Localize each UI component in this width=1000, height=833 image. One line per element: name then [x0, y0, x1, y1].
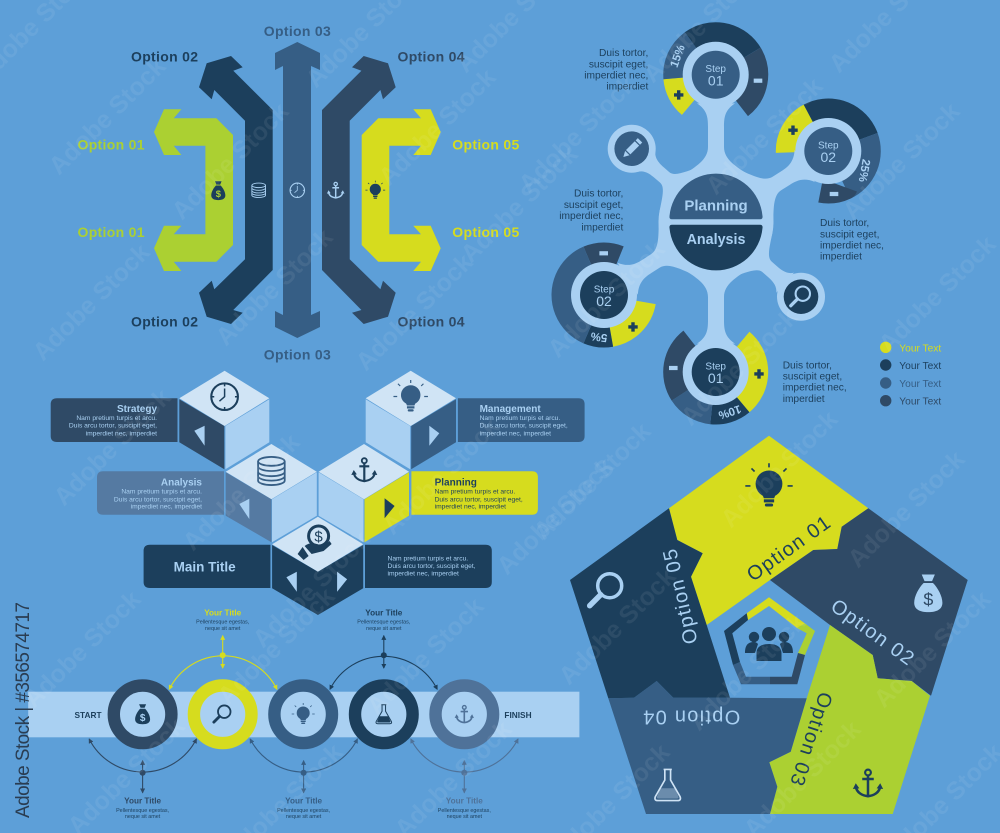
node: bottom step 01: Step — [705, 362, 726, 372]
arrow: option 02 — [199, 56, 273, 324]
callout: mid bottom: neque sit amet — [286, 814, 322, 820]
callout: navy top: neque sit amet — [366, 626, 402, 632]
donut: right step 02 — [774, 97, 882, 205]
box: management: Management — [480, 404, 541, 415]
arrow: option 05 — [362, 109, 441, 271]
box: analysis: Nam pretium turpis et arcu. — [121, 489, 202, 496]
icon: money bag: $ — [216, 188, 222, 199]
callout: muted bottom: Your Title — [446, 796, 483, 805]
box: analysis: imperdiet nec, imperdiet — [131, 504, 202, 511]
callout: navy top: Pellentesque egestas, — [357, 620, 411, 626]
legend: Your Text — [899, 379, 941, 390]
label: option 03 top: Option 03 — [264, 23, 331, 39]
watermark: Adobe Stock — [513, 70, 641, 198]
box: planning: imperdiet nec, imperdiet — [435, 504, 506, 511]
label: option 03: Option 03 — [785, 689, 836, 788]
inner pentagon ring — [724, 597, 815, 684]
callout: muted bottom — [411, 739, 518, 820]
note: right: suscipit eget, — [820, 229, 879, 240]
label: option 02 bottom: Option 02 — [131, 314, 198, 330]
ring: money bag — [114, 686, 171, 743]
label: option 02 top: Option 02 — [131, 49, 198, 65]
icon: anchor — [327, 182, 345, 198]
icon: people — [745, 627, 793, 661]
box: strategy: Strategy — [117, 404, 157, 415]
analysis half disc: Analysis — [687, 232, 745, 248]
callout: yellow top: neque sit amet — [205, 626, 241, 632]
percent: 25%: 25% — [856, 158, 872, 183]
box: main title — [144, 545, 270, 588]
watermark: Adobe Stock — [491, 452, 619, 580]
ring: flask — [355, 686, 413, 743]
watermark: Adobe Stock — [18, 585, 146, 713]
callout: navy top — [330, 608, 437, 689]
arrow: option 03 — [275, 42, 320, 338]
panel: planning and analysis hub — [552, 18, 941, 428]
node: right step 02: 02 — [821, 149, 836, 165]
legend: Your Text — [899, 361, 941, 372]
analysis half disc — [669, 225, 763, 270]
node: left step 02: Step — [594, 284, 615, 296]
watermark: Adobe Stock — [683, 608, 811, 736]
callout: muted bottom: Pellentesque egestas, — [438, 808, 491, 814]
segment: option 03 — [769, 625, 930, 814]
box: strategy: imperdiet nec, imperdiet — [86, 430, 157, 437]
node: bottom step 01 — [692, 348, 740, 396]
icon: money bag — [211, 181, 225, 200]
cube: planning — [319, 444, 409, 542]
note: top left: imperdiet nec, — [584, 70, 648, 81]
box: planning: Duis arcu tortor, suscipit eget, — [435, 496, 523, 503]
icon: bulb — [365, 181, 385, 199]
icon: database — [252, 183, 266, 198]
planning half disc: Planning — [684, 198, 748, 215]
watermark: Adobe Stock — [868, 585, 996, 713]
label: option 04 bottom: Option 04 — [398, 314, 465, 330]
icon: money bag — [914, 574, 942, 612]
node: top step 01: Step — [705, 64, 726, 75]
segment: option 04 — [608, 681, 807, 814]
node: right step 02 — [804, 127, 852, 175]
finish label: FINISH — [504, 710, 532, 720]
planning half disc — [669, 174, 763, 219]
connector body — [571, 42, 861, 405]
box: main description: Nam pretium turpis et arcu. — [388, 555, 468, 562]
node: search icon — [784, 279, 818, 314]
box: analysis — [97, 471, 224, 515]
icon: magnifier — [590, 574, 622, 606]
note: right: imperdiet — [820, 252, 862, 263]
label: option 01: Option 01 — [743, 512, 835, 586]
callout: mid bottom: Your Title — [285, 796, 323, 805]
percent: 15%: 15% — [669, 43, 688, 69]
watermark: Adobe Stock — [700, 72, 828, 200]
label: option 02: Option 02 — [826, 595, 918, 670]
note: bottom: imperdiet — [783, 394, 825, 405]
note: right: Duis tortor, — [820, 218, 869, 229]
watermark: Adobe Stock — [553, 562, 681, 690]
label: option 04 top: Option 04 — [398, 49, 465, 65]
legend: Your Text — [899, 397, 941, 408]
node: pencil icon — [614, 131, 649, 166]
start label: START — [74, 710, 102, 720]
callout: slate bottom — [89, 739, 196, 820]
node: top step 01: 01 — [708, 72, 724, 88]
icon: flask — [655, 769, 680, 801]
icon: money bag: $ — [923, 590, 933, 610]
box: management: Nam pretium turpis et arcu. — [480, 415, 560, 422]
watermark: Adobe Stock — [873, 230, 1000, 358]
callout: slate bottom: Your Title — [124, 796, 162, 805]
watermark: Adobe Stock — [455, 140, 583, 268]
note: left: imperdiet — [581, 222, 623, 233]
callout: yellow top: Your Title — [204, 608, 242, 618]
segment: option 05 — [570, 508, 730, 698]
ring: anchor — [436, 686, 493, 743]
callout: slate bottom: Pellentesque egestas, — [116, 808, 170, 814]
box: strategy: Nam pretium turpis et arcu. — [76, 415, 157, 422]
icon: clock — [290, 183, 304, 198]
callout: slate bottom: neque sit amet — [125, 814, 161, 820]
note: bottom: suscipit eget, — [783, 372, 842, 383]
arrow: option 01 — [154, 109, 233, 271]
label: option 04: Option 04 — [643, 706, 740, 728]
watermark: Adobe Stock — [27, 238, 155, 366]
watermark: Adobe Stock — [715, 405, 843, 533]
donut: left step 02 — [552, 243, 656, 347]
cube: analysis — [226, 444, 317, 542]
percent: 5%: 5% — [590, 329, 608, 343]
watermark: Adobe Stock — [350, 248, 478, 376]
callout: yellow top: Pellentesque egestas, — [196, 620, 250, 626]
callout: mid bottom: Pellentesque egestas, — [277, 808, 331, 814]
label: option 03 bottom: Option 03 — [264, 346, 331, 362]
watermark: Adobe Stock — [542, 235, 670, 363]
icon: anchor — [853, 770, 883, 796]
segment: option 02 — [770, 508, 968, 696]
box: main description: Duis arcu tortor, suscipit eget, — [388, 563, 476, 570]
label: option 01 top: Option 01 — [78, 136, 145, 152]
watermark: Adobe Stock — [377, 412, 505, 540]
node: left step 02 — [580, 271, 628, 319]
box: strategy: Duis arcu tortor, suscipit eget, — [69, 423, 157, 430]
panel: start to finish timeline — [28, 608, 579, 820]
box: management: imperdiet nec, imperdiet — [480, 430, 551, 437]
note: left: suscipit eget, — [564, 200, 623, 211]
callout: navy top: Your Title — [365, 608, 403, 618]
watermark: Adobe Stock — [842, 445, 970, 573]
cube: management — [366, 371, 456, 469]
watermark: Adobe Stock — [247, 525, 375, 653]
watermark: Adobe Stock — [528, 417, 656, 545]
cube: strategy — [179, 371, 269, 469]
callout: yellow top — [169, 608, 277, 689]
watermark: Adobe Stock — [43, 52, 171, 180]
ring: search — [194, 686, 252, 743]
legend: Your Text — [899, 343, 941, 354]
stock id side text: Adobe Stock | #356574717 — [13, 602, 34, 818]
watermark: Adobe Stock — [177, 428, 305, 556]
donut: bottom step 01 — [659, 316, 772, 428]
ring: money bag: $ — [140, 713, 146, 724]
watermark: Adobe Stock — [212, 582, 340, 710]
cube: main title — [272, 517, 363, 615]
panel: pentagon — [570, 436, 968, 814]
watermark: Adobe Stock — [373, 63, 501, 191]
node: right step 02: Step — [818, 140, 839, 152]
note: left: Duis tortor, — [574, 189, 623, 200]
box: planning — [411, 471, 538, 515]
note: bottom: Duis tortor, — [783, 360, 832, 371]
note: right: imperdiet nec, — [820, 240, 884, 251]
callout: muted bottom: neque sit amet — [447, 814, 482, 820]
panel: arrows diagram — [78, 23, 520, 362]
plus and minus marks — [599, 79, 838, 379]
percent: 10%: 10% — [717, 402, 742, 421]
box: analysis: Analysis — [161, 477, 202, 488]
arrow: option 04 — [322, 56, 396, 324]
box: main description: imperdiet nec, imperdiet — [388, 571, 459, 578]
box: analysis: Duis arcu tortor, suscipit eget, — [114, 496, 202, 503]
watermark: Adobe Stock — [48, 383, 176, 511]
note: left: imperdiet nec, — [559, 211, 623, 222]
box: planning: Planning — [435, 477, 477, 488]
segment: option 01 — [669, 436, 868, 625]
watermark: Adobe Stock — [675, 303, 803, 431]
note: bottom: imperdiet nec, — [783, 383, 847, 394]
box: management: Duis arcu tortor, suscipit eget, — [480, 423, 568, 430]
donut: top step 01 — [659, 18, 772, 131]
label: option 05: Option 05 — [659, 547, 703, 646]
legend — [880, 342, 941, 408]
icon: bulb — [745, 463, 793, 507]
note: top left: Duis tortor, — [599, 48, 648, 59]
box: planning: Nam pretium turpis et arcu. — [435, 489, 515, 496]
box: management — [458, 398, 585, 442]
timeline band — [28, 692, 579, 737]
ring: bulb — [274, 686, 332, 743]
cube: main title: $ — [314, 528, 323, 546]
watermark: Adobe Stock — [837, 97, 965, 225]
callout: mid bottom — [250, 739, 357, 820]
box: main description — [365, 545, 492, 588]
panel: isometric cubes — [51, 371, 585, 615]
note: top left: suscipit eget, — [589, 59, 648, 70]
node: left step 02: 02 — [596, 293, 612, 309]
label: option 05 top: Option 05 — [452, 136, 520, 152]
box: strategy — [51, 398, 178, 442]
node: bottom step 01: 01 — [708, 370, 724, 386]
watermark: Adobe Stock — [210, 223, 338, 351]
label: option 01 bottom: Option 01 — [78, 224, 145, 240]
note: top left: imperdiet — [606, 82, 648, 93]
watermark: Adobe Stock — [361, 592, 489, 720]
box: main title: Main Title — [174, 560, 236, 575]
watermark: Adobe Stock — [166, 97, 294, 225]
node: top step 01 — [692, 51, 740, 99]
label: option 05 bottom: Option 05 — [452, 224, 520, 240]
